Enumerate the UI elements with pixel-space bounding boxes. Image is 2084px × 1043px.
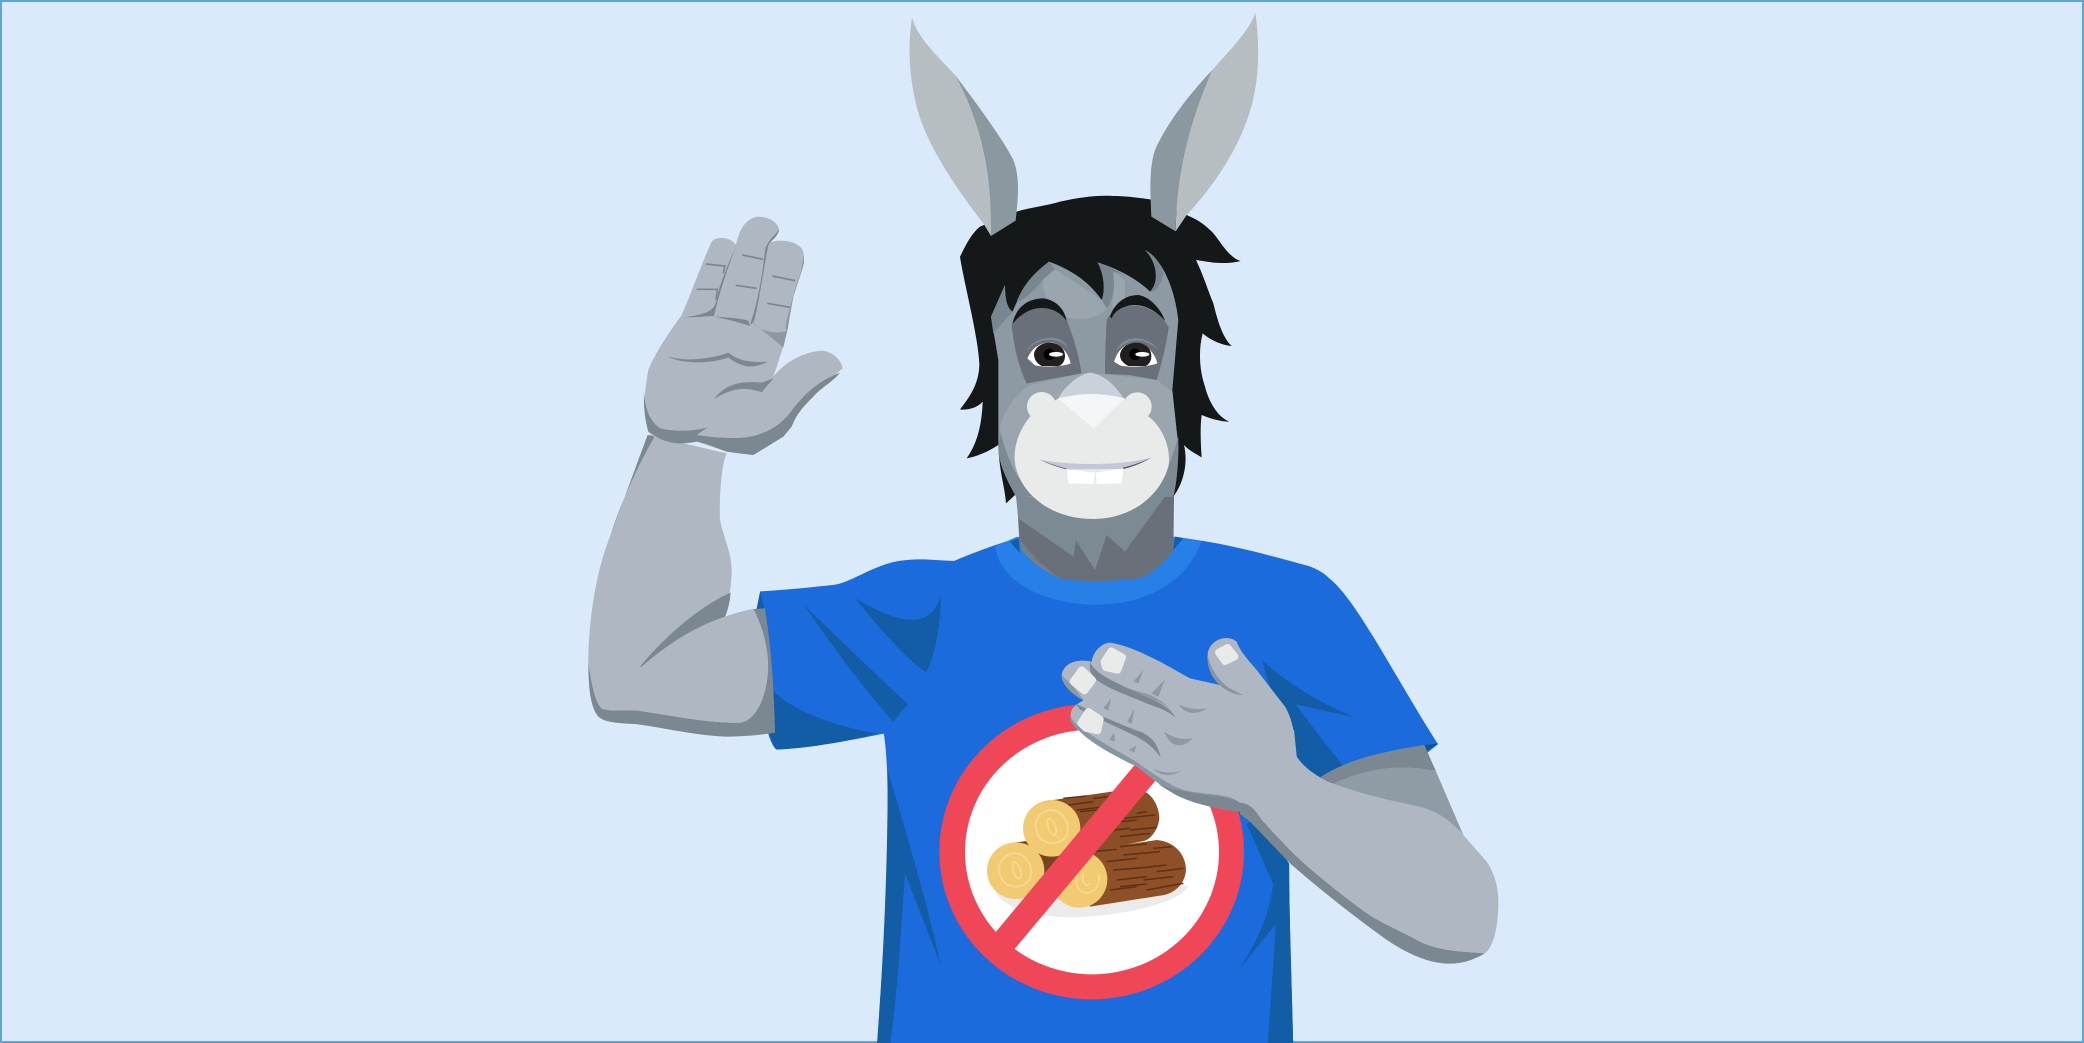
- fingernails: [1073, 648, 1235, 731]
- arm edge sliver: [610, 435, 655, 537]
- hair: [960, 196, 1241, 503]
- hand lower shadow: [1070, 717, 1240, 812]
- right eyebrow: [1110, 295, 1165, 321]
- ground shadow: [995, 880, 1188, 917]
- right ear: [1150, 13, 1258, 231]
- arm fill: [588, 435, 768, 723]
- thumb shade: [1207, 653, 1243, 695]
- raised hand: [644, 217, 843, 455]
- red ring: [939, 704, 1244, 999]
- muzzle surround: [1000, 373, 1178, 507]
- red slash: [983, 751, 1166, 964]
- face base: [991, 250, 1178, 497]
- neck: [1010, 453, 1183, 581]
- nose bridge: [1058, 373, 1123, 398]
- no logs sign ring: [939, 704, 1244, 999]
- finger gaps: [1090, 662, 1176, 718]
- right eye: [1114, 338, 1159, 367]
- left eyebrow: [1012, 298, 1067, 324]
- blue t-shirt: [756, 537, 1462, 1043]
- log pile: [987, 790, 1188, 917]
- head and face: [991, 250, 1178, 519]
- muzzle: [1015, 392, 1169, 519]
- mouth and teeth: [1039, 457, 1152, 484]
- forehead highlight: [1043, 269, 1125, 319]
- arm underside shadow: [588, 608, 775, 737]
- eye sockets: [1012, 306, 1082, 383]
- middle fingertip shade: [1062, 675, 1083, 700]
- log bodies: [1080, 840, 1186, 907]
- jaw shading: [998, 433, 1178, 500]
- hand over heart: [1062, 638, 1300, 812]
- log end faces: [987, 842, 1044, 899]
- right arm: [1240, 730, 1498, 964]
- elbow crease: [640, 593, 731, 667]
- hand shadow: [644, 373, 840, 455]
- knuckle and back-of-hand creases: [1103, 670, 1207, 775]
- left eye: [1026, 338, 1071, 366]
- white disc: [965, 730, 1219, 974]
- shirt collar: [995, 537, 1201, 605]
- bark grain: [1063, 796, 1183, 890]
- raised left arm: [588, 435, 775, 737]
- right sleeve underside: [1320, 743, 1463, 835]
- left ear: [910, 17, 1018, 236]
